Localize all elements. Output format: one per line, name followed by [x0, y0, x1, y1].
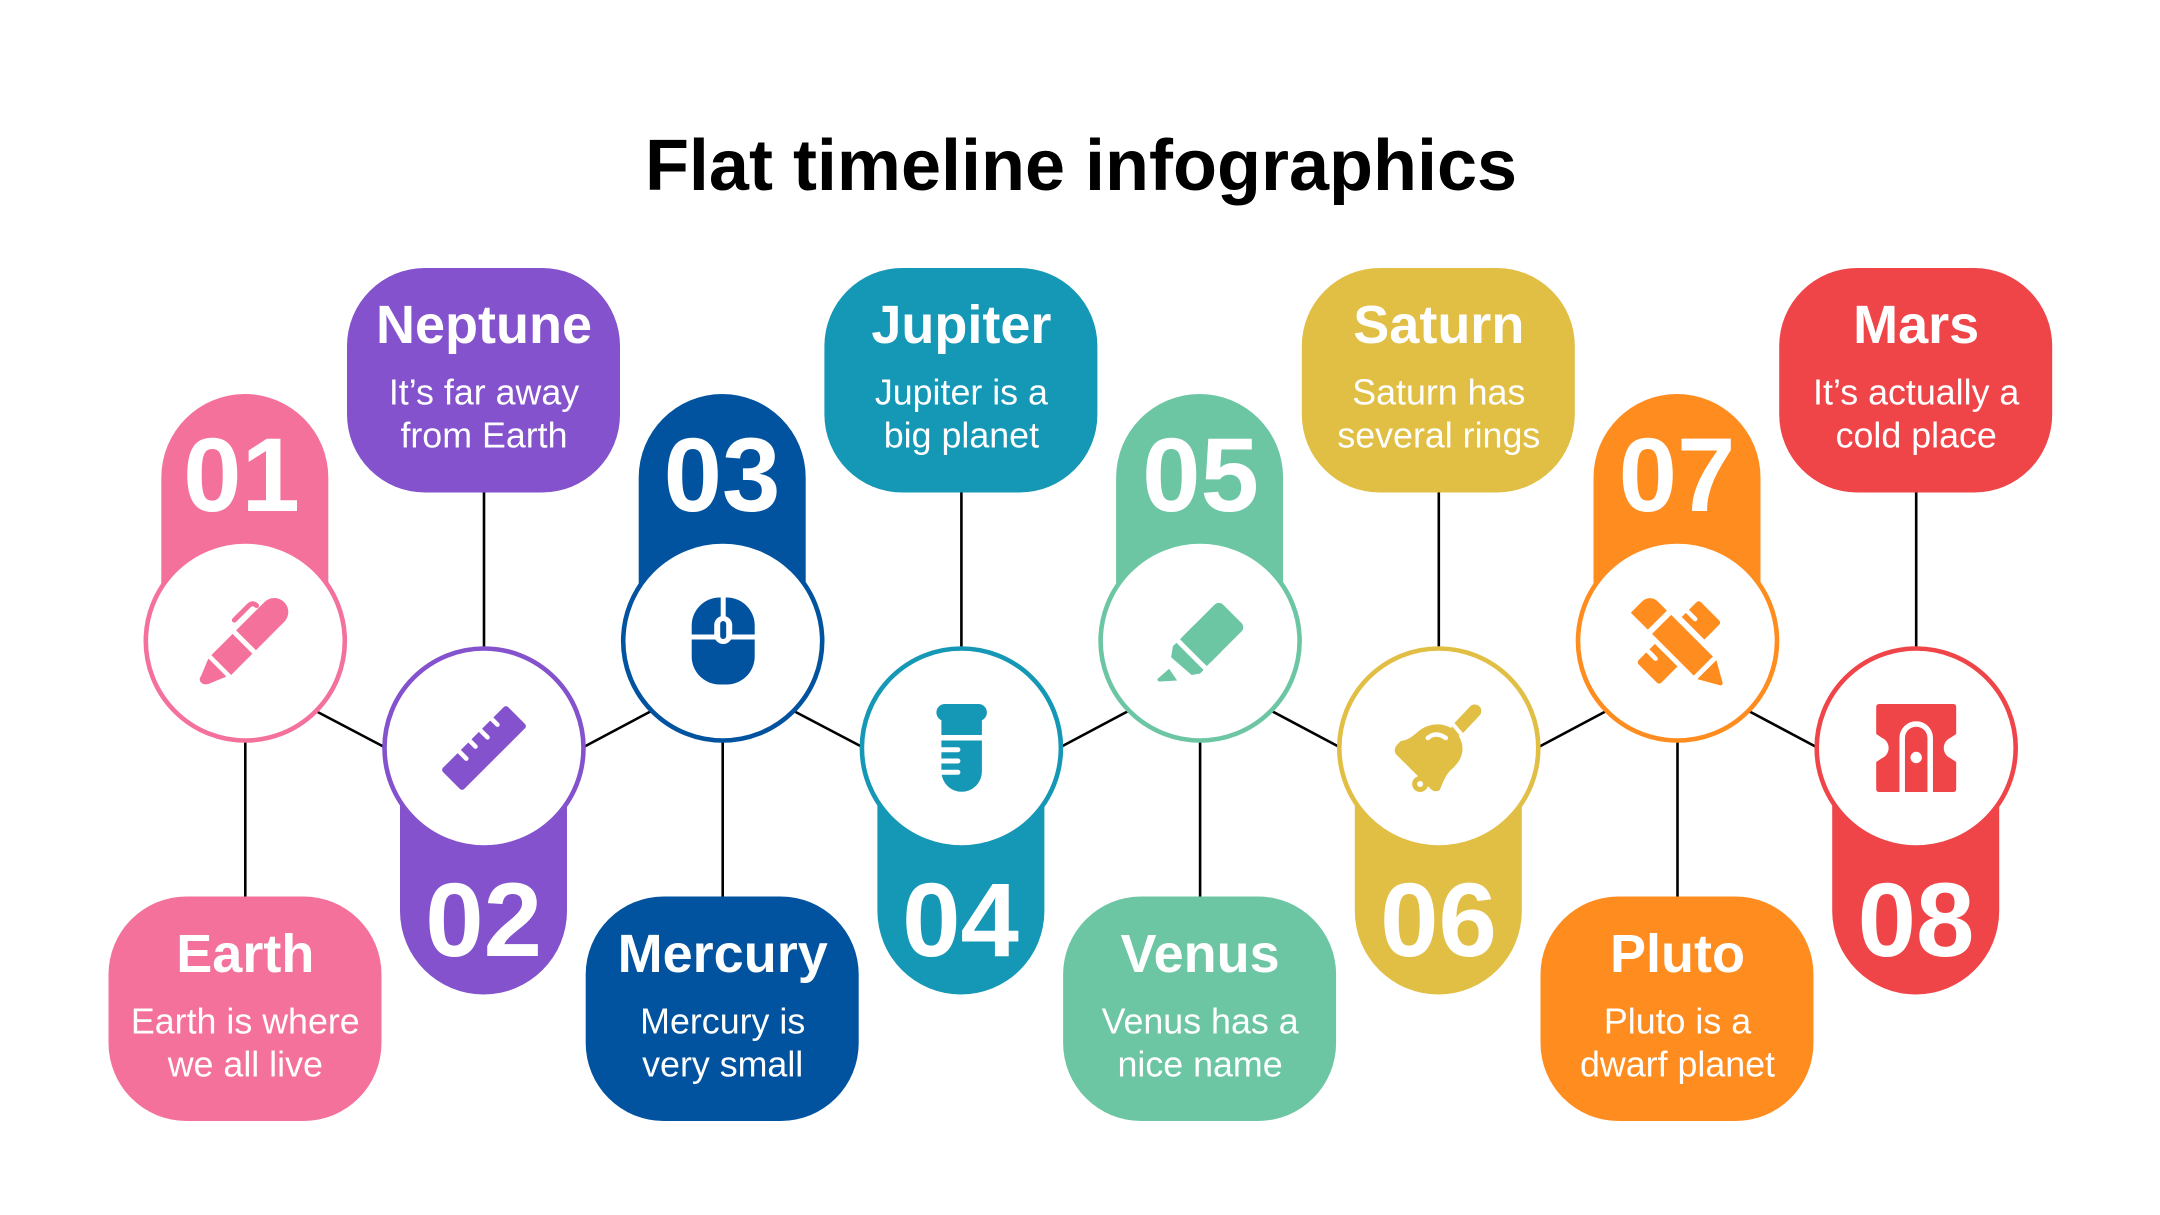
number pill 02: 02 — [425, 862, 542, 979]
node circle 03 — [623, 542, 822, 740]
node circle 08 — [1817, 648, 2016, 848]
card: Neptune: It’s far away — [389, 373, 579, 413]
connector lines — [245, 490, 1916, 900]
card: Saturn: several rings — [1337, 416, 1540, 456]
icon: highlighter — [1157, 600, 1246, 682]
number pill 03: 03 — [664, 417, 780, 534]
step 05: Venus — [1063, 394, 1336, 1121]
node circle 06 — [1339, 648, 1538, 848]
number pill 02 — [400, 748, 567, 995]
title: Flat timeline infographics — [645, 126, 1517, 206]
step 03: Mercury — [586, 394, 859, 1121]
card: Mars — [1779, 268, 2052, 492]
icon: pen — [187, 586, 294, 693]
icon: ruler — [439, 703, 527, 791]
card: Jupiter — [824, 268, 1097, 492]
card: Jupiter: Jupiter is a — [875, 373, 1048, 413]
card: Neptune: Neptune — [376, 295, 592, 355]
card: Pluto: dwarf planet — [1580, 1045, 1775, 1085]
step 06: Saturn — [1302, 268, 1575, 995]
card: Saturn: Saturn — [1353, 295, 1524, 355]
card: Mercury: Mercury is — [640, 1002, 805, 1042]
icon: sharpener — [1876, 704, 1956, 793]
node circle 01 — [146, 542, 345, 740]
card: Pluto: Pluto — [1610, 924, 1745, 984]
node circle 04 — [862, 648, 1061, 848]
icon: test tube — [936, 704, 987, 792]
icon: bell — [1395, 711, 1475, 792]
card: Jupiter: Jupiter — [871, 295, 1051, 355]
card: Neptune — [347, 268, 620, 492]
step 01: Earth — [108, 394, 382, 1121]
card: Pluto: Pluto is a — [1604, 1002, 1751, 1042]
number pill 06: 06 — [1380, 862, 1497, 979]
number pill 06 — [1355, 748, 1522, 995]
card: Mars: cold place — [1836, 416, 1997, 456]
icon: mouse — [691, 597, 756, 684]
card: Venus: nice name — [1118, 1045, 1283, 1085]
card: Mars: It’s actually a — [1813, 373, 2019, 413]
card: Neptune: from Earth — [400, 416, 568, 456]
card: Earth: we all live — [167, 1045, 323, 1085]
card: Venus: Venus has a — [1102, 1002, 1299, 1042]
number pill 01: 01 — [183, 417, 300, 534]
card: Earth: Earth is where — [131, 1002, 360, 1042]
step 02: Neptune — [347, 268, 620, 995]
number pill 05: 05 — [1142, 417, 1259, 534]
card: Mercury — [586, 896, 859, 1121]
card: Earth: Earth — [176, 924, 314, 984]
node circle 02 — [384, 648, 584, 848]
node circle 05 — [1101, 542, 1300, 740]
card: Saturn: Saturn has — [1352, 373, 1525, 413]
card: Venus — [1063, 896, 1336, 1121]
step 07: Pluto — [1540, 394, 1814, 1121]
card: Venus: Venus — [1121, 924, 1280, 984]
card: Mars: Mars — [1853, 295, 1979, 355]
card: Jupiter: big planet — [884, 416, 1039, 456]
number pill 08 — [1832, 748, 1999, 995]
card: Pluto — [1540, 896, 1814, 1121]
number pill 03 — [639, 394, 806, 641]
number pill 05 — [1116, 394, 1283, 641]
card: Mercury: very small — [642, 1045, 803, 1085]
card: Earth — [108, 896, 382, 1121]
step 04: Jupiter — [824, 268, 1097, 995]
card: Mercury: Mercury — [618, 924, 828, 984]
node circle 07 — [1578, 542, 1777, 740]
icon: pencil and ruler — [1627, 589, 1736, 698]
number pill 04 — [877, 748, 1044, 995]
number pill 07 — [1594, 394, 1760, 641]
card: Saturn — [1302, 268, 1575, 492]
number pill 04: 04 — [902, 862, 1019, 979]
step 08: Mars — [1779, 268, 2052, 995]
number pill 08: 08 — [1858, 862, 1974, 979]
number pill 01 — [161, 394, 328, 641]
number pill 07: 07 — [1619, 417, 1735, 534]
